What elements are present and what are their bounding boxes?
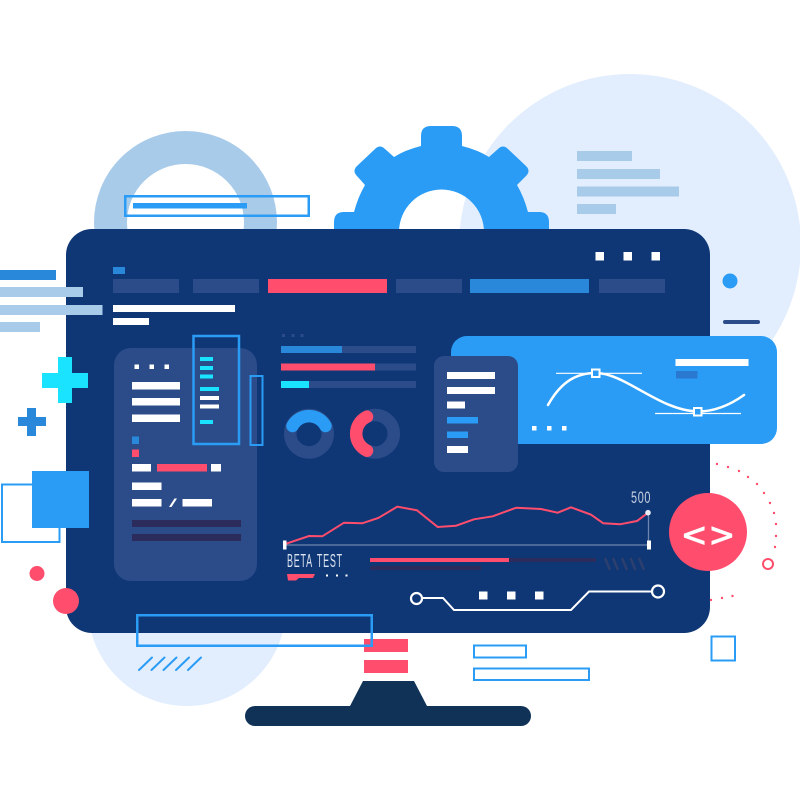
scrollbar frame	[250, 376, 262, 445]
lower blue frame	[137, 615, 372, 646]
section dots	[282, 334, 304, 337]
solid square	[32, 471, 89, 528]
outline square: right	[712, 636, 735, 660]
small pink ring	[763, 559, 773, 569]
background circle: top right	[459, 74, 800, 416]
monitor stand	[245, 681, 531, 726]
heading lines	[113, 305, 235, 325]
navy dash	[723, 320, 760, 324]
line chart	[283, 488, 651, 550]
circuit line	[411, 586, 664, 610]
blue dot	[722, 274, 738, 288]
text lines: left	[0, 270, 102, 332]
navigation tabs	[113, 279, 665, 293]
stand bars	[364, 639, 408, 673]
curve handles	[592, 370, 702, 416]
code badge: <>	[680, 515, 736, 554]
label underline and dots	[287, 574, 348, 580]
outline square	[2, 484, 60, 542]
dotted arc	[710, 463, 777, 601]
panel: navy list card	[434, 356, 518, 472]
donut chart: blue	[290, 415, 328, 452]
hatch marks	[605, 558, 644, 570]
outline box: long	[474, 668, 589, 680]
icon: cyan plus	[42, 357, 88, 403]
pink dot small	[30, 566, 44, 581]
address bar outline	[125, 196, 309, 216]
test progress bars	[370, 558, 596, 570]
beta test label: BETA TEST	[287, 552, 343, 572]
hatch lines	[139, 658, 201, 670]
background ring: top left	[110, 148, 260, 298]
code badge	[669, 493, 747, 571]
window dots	[596, 252, 660, 260]
monitor screen	[66, 229, 710, 633]
form content	[132, 364, 241, 541]
floating list frame	[194, 336, 239, 444]
panel: blue curve card	[451, 336, 777, 444]
circuit squares	[479, 592, 544, 600]
background circle: bottom left	[88, 508, 286, 706]
text lines: top right	[577, 151, 679, 214]
panel: left form	[114, 348, 257, 581]
icon: gear	[334, 126, 549, 240]
icon: blue plus	[18, 408, 46, 436]
card dots	[532, 426, 566, 430]
outline box: short	[474, 646, 526, 658]
tangent lines	[556, 373, 741, 414]
donut chart: pink	[356, 415, 394, 452]
progress bars	[281, 346, 416, 388]
pink dot large	[53, 588, 79, 614]
chart value: 500	[631, 488, 651, 507]
small tab marker	[113, 267, 125, 274]
curve	[548, 373, 744, 412]
